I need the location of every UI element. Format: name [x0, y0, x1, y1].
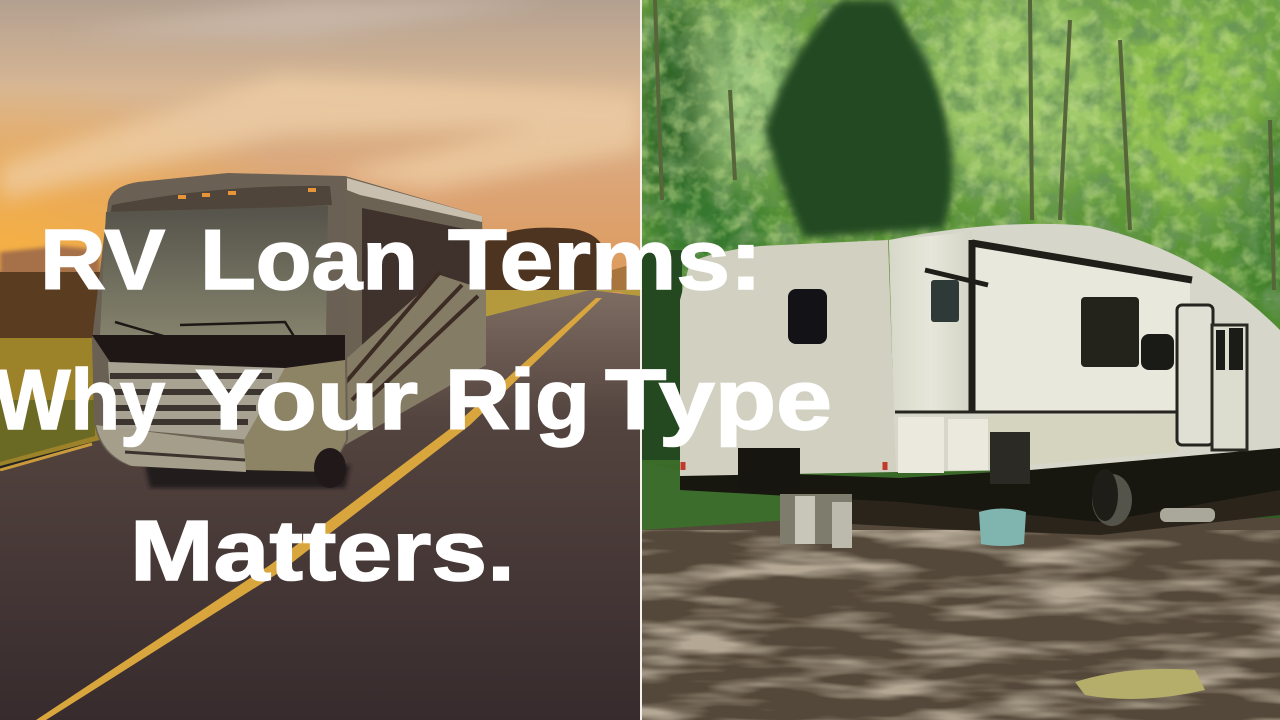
title — [0, 213, 832, 599]
trailer — [680, 224, 1280, 548]
wheel — [314, 448, 346, 488]
litter on ground — [1075, 669, 1205, 699]
motorhome — [92, 173, 486, 488]
wipers — [115, 322, 295, 338]
front mask and grille — [92, 335, 345, 372]
sunset sky — [0, 0, 640, 300]
trailer side wall — [889, 224, 1280, 472]
distant hills and treeline — [0, 228, 640, 340]
motorhome shadow — [145, 465, 350, 488]
storage hatches — [898, 417, 944, 473]
title: Loan — [200, 213, 418, 308]
road centre line — [36, 298, 602, 720]
trailer rear wall — [680, 240, 896, 476]
trailer windows — [788, 289, 827, 344]
roadside grass — [0, 338, 100, 466]
dark treeline behind trailer — [642, 250, 682, 460]
lower band — [988, 415, 1178, 465]
road — [0, 290, 640, 720]
motorhome front — [92, 173, 348, 472]
tree trunks — [655, 0, 1274, 290]
title: Type — [605, 353, 832, 448]
title: Rig — [445, 353, 590, 448]
motorhome side — [345, 176, 482, 358]
road edge line — [0, 444, 92, 470]
support blocks — [780, 494, 852, 544]
title: Your — [195, 353, 418, 448]
trailer undercarriage — [680, 445, 1280, 522]
panel: motorhome on a sunset road — [0, 0, 640, 720]
rear bumper — [738, 448, 800, 475]
windshield — [100, 206, 328, 335]
dirt ground — [642, 462, 1280, 720]
leaf texture — [642, 0, 1280, 330]
side panel — [975, 245, 1190, 412]
panel: travel trailer at a forest campsite — [640, 0, 1280, 720]
lower front cap — [244, 360, 346, 472]
teal bucket — [979, 508, 1026, 546]
dark central tree — [765, 0, 952, 238]
title: Terms: — [448, 213, 762, 308]
trailer wheels — [1092, 474, 1132, 526]
trailer door — [1177, 305, 1213, 445]
centre divider — [640, 0, 642, 720]
title: Matters. — [130, 504, 515, 599]
forest background — [640, 0, 1280, 530]
tail lights — [683, 462, 885, 470]
marker lights — [178, 190, 316, 197]
title: RV — [40, 213, 165, 308]
